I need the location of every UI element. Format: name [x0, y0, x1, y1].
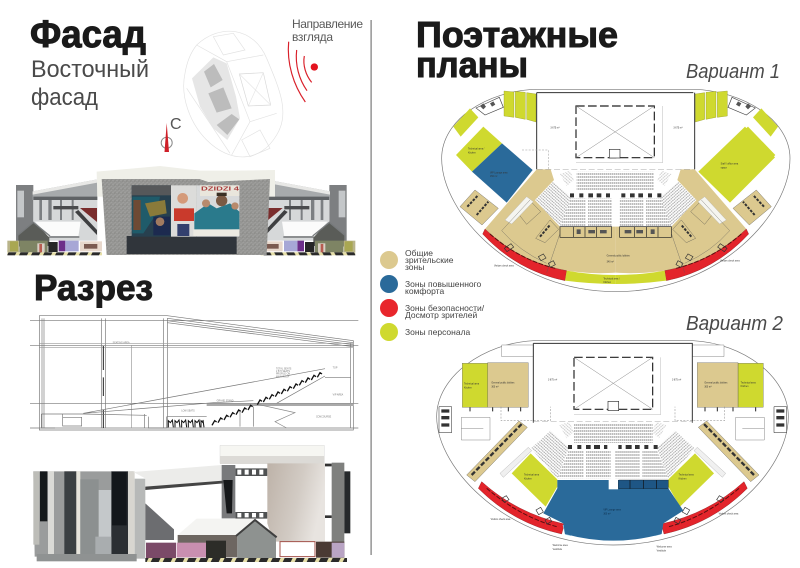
- icon: north arrow: [161, 116, 182, 152]
- view direction label: [292, 17, 363, 44]
- variant 1 room labels: Visitors check area: [494, 265, 514, 268]
- section labels: GRAND STAND: [217, 399, 234, 402]
- variant 1 room labels: 3 675 m²: [550, 127, 560, 130]
- variant 1 room labels: General public lobbies: [607, 255, 631, 258]
- stage: [576, 106, 663, 163]
- heading: Поэтажные планы: [416, 14, 618, 85]
- section drawing: [30, 316, 358, 430]
- legend: public zones: зоны: [405, 262, 424, 272]
- variant 1 room labels: space: [721, 167, 728, 169]
- section labels: SEATING AREA: [113, 341, 130, 344]
- subheading: Вариант 1: Вариант 1: [686, 61, 780, 83]
- legend: comfort zones: [380, 275, 482, 296]
- variant 1 room labels: 340 m²: [607, 260, 614, 263]
- variant 2 room labels: 300 m²: [491, 385, 499, 388]
- variant 2 room labels: Welcome area: [553, 544, 568, 547]
- variant 2 room labels: 300 m²: [603, 512, 611, 515]
- variant 1 room labels: 3 675 m²: [673, 127, 683, 130]
- variant 2 room labels: [464, 379, 756, 552]
- vertical divider: [370, 20, 372, 555]
- stage: [574, 357, 661, 415]
- variant 1 room labels: Kitchen: [603, 281, 612, 284]
- legend: public zones: зрительские: [405, 255, 454, 265]
- legend: comfort zones: Зоны повышенного: [405, 279, 482, 289]
- subheading: Восточный фасад: Восточный: [31, 56, 149, 83]
- variant 1 room labels: Kitchen: [468, 151, 476, 154]
- facade billboard title: DZIDZI 4: [201, 186, 239, 192]
- variant 2 room labels: Vestibule: [553, 548, 563, 551]
- heading: Поэтажные планы: планы: [416, 44, 528, 85]
- legend: [380, 248, 485, 341]
- variant 1 room labels: Visitors check area: [720, 260, 740, 263]
- legend: comfort zones: комфорта: [405, 286, 444, 296]
- legend: public zones: Общие: [405, 248, 433, 258]
- icon: view direction signal: [288, 42, 318, 102]
- heading: Поэтажные планы: Поэтажные: [416, 14, 618, 55]
- variant 2 room labels: Kitchen: [524, 477, 532, 480]
- variant 2 room labels: Kitchen: [679, 477, 687, 480]
- heading: Разрез: Разрез: [34, 267, 153, 308]
- view direction label: Направление: [292, 17, 363, 31]
- section labels: LOW SEATS: [181, 410, 195, 413]
- variant 2 room labels: Welcome area: [657, 545, 672, 548]
- variant 2 room labels: Technical area: [464, 383, 480, 386]
- view direction label: взгляда: [292, 30, 333, 44]
- section labels: VIP AREA: [333, 393, 344, 396]
- variant 2 room labels: 3 675 m²: [672, 379, 681, 382]
- legend: security zones: Зоны безопасности/: [405, 303, 485, 313]
- section labels: PROFILE ON: [276, 374, 290, 376]
- section labels: [113, 341, 344, 419]
- section labels: 2 572 SEATS: [276, 370, 290, 373]
- variant 1 room labels: VIP Lounge area: [490, 171, 508, 174]
- variant 2 room labels: Vestibule: [657, 549, 667, 552]
- variant 1 room labels: Technical area /: [468, 148, 485, 151]
- variant 1 room labels: Technical area /: [603, 277, 620, 280]
- variant 2 room labels: 3 675 m²: [548, 379, 557, 382]
- facade elevation illustration: [7, 166, 355, 255]
- legend: staff zones: Зоны персонала: [405, 327, 471, 337]
- variant 2 room labels: Kitchen: [741, 385, 749, 388]
- variant 1 room labels: [468, 127, 740, 284]
- heading: Фасад: Фасад: [30, 14, 146, 56]
- section labels: TOTAL SEATS: [276, 367, 292, 370]
- variant 2 room labels: Technical area: [679, 473, 694, 476]
- variant 2 room labels: General public lobbies: [704, 381, 728, 384]
- subheading: Восточный фасад: фасад: [31, 84, 98, 111]
- icon: north arrow: С: [170, 116, 182, 133]
- section labels: CONCOURSE: [316, 417, 332, 419]
- legend: security zones: Досмотр зрителей: [405, 310, 477, 320]
- variant 2 room labels: Technical area: [741, 381, 756, 384]
- subheading: Восточный фасад: [31, 56, 149, 111]
- variant 1 room labels: 150 m²: [490, 175, 497, 178]
- variant 2 room labels: Visitors check area: [491, 518, 511, 521]
- variant 2 room labels: VIP Lounge area: [603, 509, 621, 512]
- variant 1 room labels: Staff / office area: [721, 163, 739, 166]
- legend: public zones: [380, 248, 454, 272]
- section render illustration: [33, 445, 350, 562]
- variant 2 room labels: Technical area: [524, 473, 540, 476]
- legend: security zones: [380, 299, 485, 320]
- variant 2 room labels: Visitors check area: [719, 513, 739, 516]
- subheading: Вариант 2: Вариант 2: [686, 313, 783, 335]
- variant 2 room labels: General public lobbies: [491, 381, 515, 384]
- key plan: building orientation: [184, 31, 283, 157]
- section labels: TOP: [333, 368, 338, 370]
- section labels: MAIN ROOF: [276, 375, 290, 378]
- floor plan: variant 1: [442, 89, 790, 292]
- floor plan: variant 2: [437, 341, 788, 552]
- variant 2 room labels: Kitchen: [464, 386, 472, 389]
- variant 2 room labels: 300 m²: [704, 385, 712, 388]
